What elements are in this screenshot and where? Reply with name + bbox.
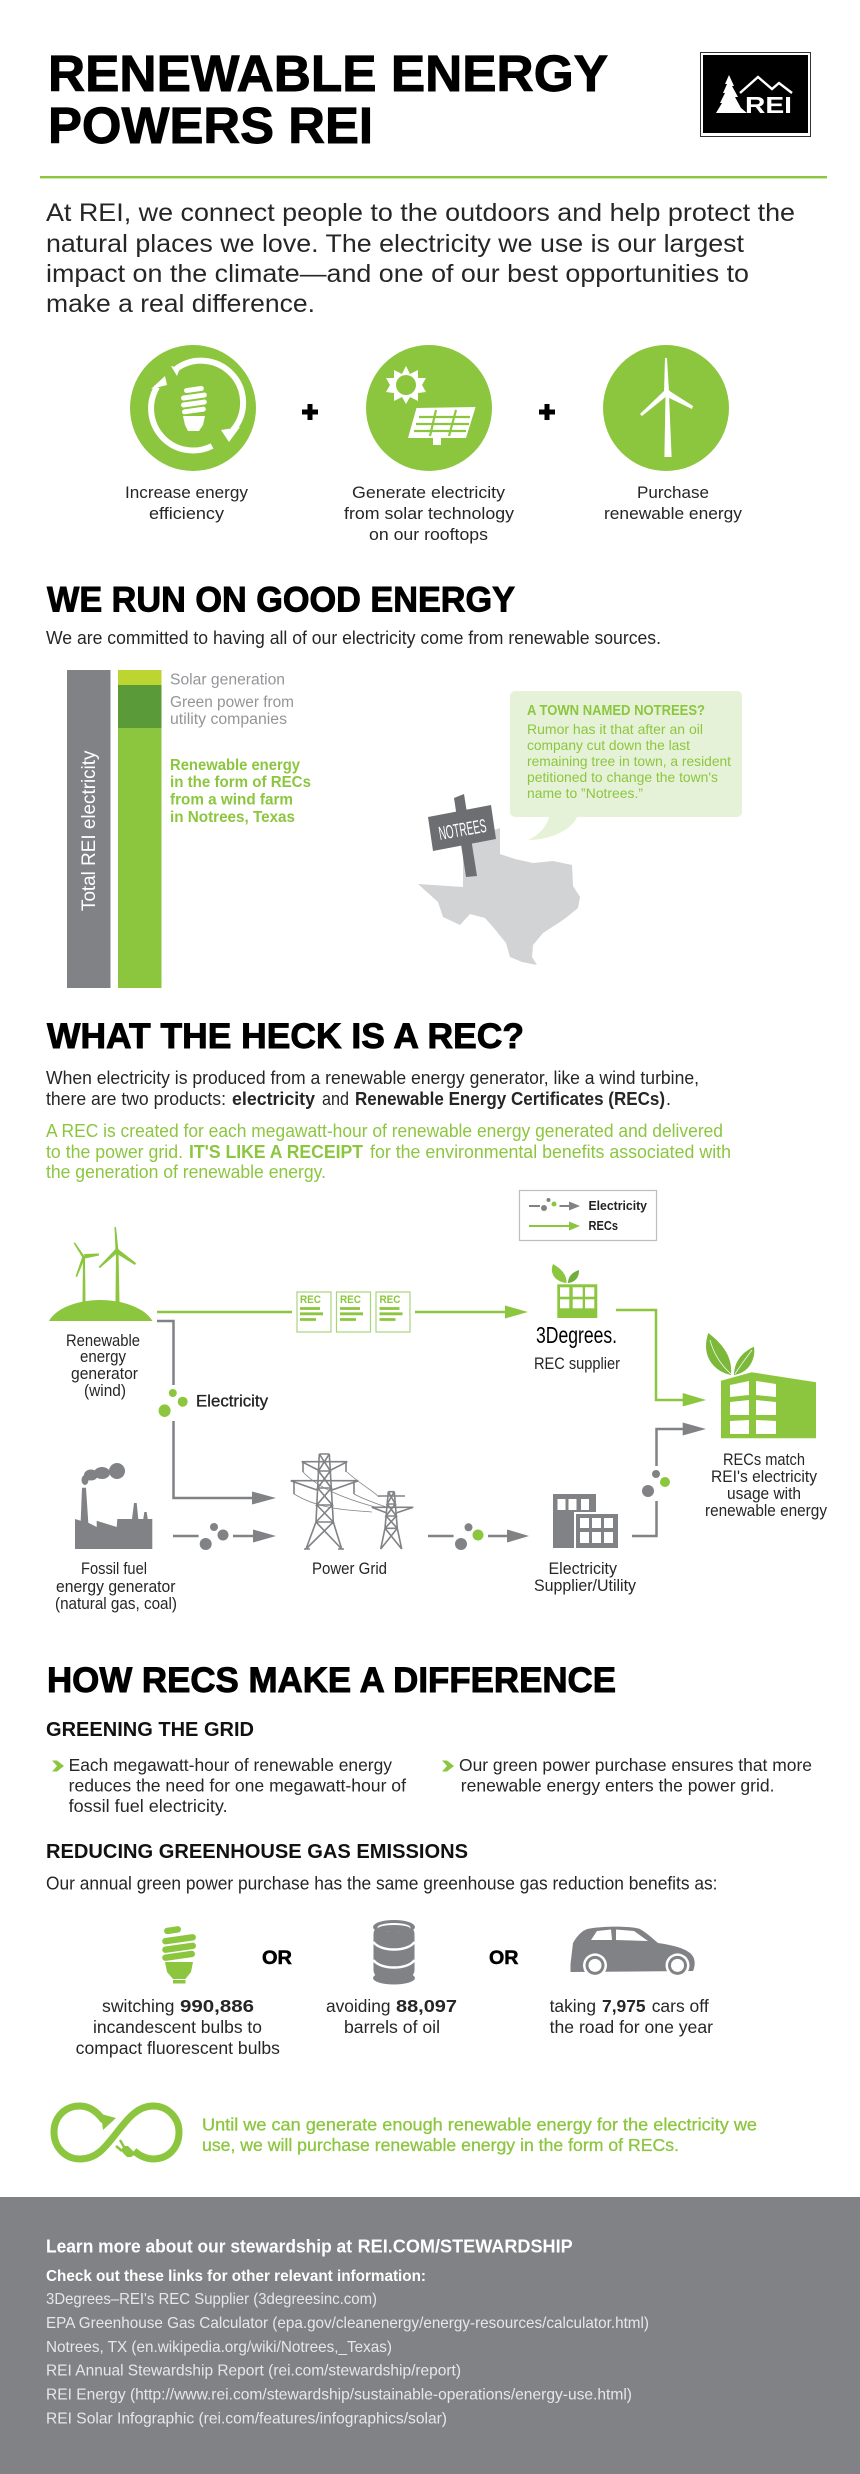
label: electricity supplier (534, 1559, 636, 1595)
caption: Generate electricity (352, 483, 506, 502)
footer links: Notrees, TX (en.wikipedia.org/wiki/Notrees,_Texas) (46, 2339, 392, 2356)
bullet: green power purchase: renewable energy enters the power grid. (461, 1776, 774, 1796)
panel: footer (0, 2197, 860, 2474)
footer heading: Learn more about our stewardship at (46, 2236, 352, 2256)
caption (125, 483, 249, 523)
stat: barrels: 88,097 (396, 1996, 457, 2016)
heading: we run on good energy: WE RUN ON GOOD ENERGY (47, 580, 515, 620)
text block: closing statement (202, 2114, 757, 2155)
label: REC supplier: REC supplier (534, 1354, 620, 1373)
label: renewable generator: (wind) (84, 1381, 126, 1400)
legend labels: from a wind farm (170, 792, 293, 808)
stat: bulbs: compact fluorescent bulbs (76, 2038, 280, 2058)
arrow: fossil electricity to grid (173, 1523, 276, 1550)
icon: REI logo (700, 52, 810, 136)
text block: receipt explanation (46, 1121, 731, 1182)
legend labels: utility companies (170, 711, 287, 728)
label: fossil fuel generator: (natural gas, coal) (55, 1594, 177, 1613)
legend (520, 1190, 656, 1240)
subheading: reducing emissions: REDUCING GREENHOUSE GAS EMISSIONS (46, 1841, 468, 1863)
icon: wind turbines on hill (49, 1227, 152, 1321)
arrow: supplier to REI (616, 1310, 706, 1406)
icon: wind turbine (603, 345, 729, 471)
text block: receipt explanation: A REC is created for each megawatt-hour of renewable energy generated and delivered (46, 1121, 723, 1141)
title: POWERS REI (48, 97, 373, 154)
legend labels: Solar generation (170, 672, 285, 688)
text block: annual purchase: Our annual green power purchase has the same greenhouse gas reduction benefits as: (46, 1874, 718, 1894)
text block: receipt explanation: IT'S LIKE A RECEIPT (189, 1142, 363, 1162)
text block: commitment: We are committed to having all of our electricity come from renewable sources. (46, 628, 661, 648)
text block: rec explanation: electricity (232, 1089, 315, 1109)
stat: cars: cars off (652, 1996, 709, 2016)
label: RECs match: renewable energy (705, 1501, 827, 1520)
caption: renewable energy (604, 504, 742, 523)
icon: REI building with leaves (706, 1333, 816, 1438)
footer heading: REI.COM/STEWARDSHIP (358, 2236, 573, 2256)
label: RECs match (705, 1450, 827, 1520)
text block: closing statement: Until we can generate enough renewable energy for the electricity we (202, 2114, 757, 2134)
text block: rec explanation: When electricity is produced from a renewable energy generator, like a wind turbine, (46, 1068, 699, 1088)
icon: bulb with circular arrows (130, 345, 256, 471)
panel: increase energy efficiency (125, 345, 256, 523)
icon: supplier building with leaves (552, 1264, 597, 1318)
icon: REC certificates: REC (300, 1294, 321, 1306)
text block: rec explanation: and (322, 1089, 349, 1109)
stat: cars (550, 1996, 713, 2037)
panel: purchase renewable energy (603, 345, 742, 523)
text block: rec explanation: . (666, 1089, 671, 1109)
label: fossil fuel generator (55, 1559, 177, 1613)
icon: infinity loop with plug (54, 2106, 179, 2159)
icon: texas map with sign: NOTREES (437, 816, 488, 845)
caption (344, 483, 515, 544)
text block: rec explanation: Renewable Energy Certificates (RECs) (355, 1089, 665, 1109)
text block: rec explanation: there are two products: (46, 1089, 226, 1109)
legend labels: Green power from (170, 694, 294, 711)
text block: receipt explanation: for the environmental benefits associated with (370, 1142, 731, 1162)
icon: green bulb (162, 1926, 196, 1984)
icon: plus (302, 404, 318, 420)
logo: 3Degrees: 3Degrees. (536, 1322, 617, 1348)
label: electricity: Electricity (196, 1392, 269, 1410)
icon: sun and solar panel (366, 345, 492, 471)
caption: on our rooftops (369, 525, 488, 544)
callout: a town named notrees: company cut down the last (527, 737, 690, 753)
icon: plus (539, 404, 555, 420)
caption (604, 483, 742, 523)
stat: barrels: barrels of oil (344, 2017, 440, 2037)
legend labels (170, 672, 311, 826)
bar: sources stack (118, 670, 162, 988)
text block: closing statement: use, we will purchase renewable energy in the form of RECs. (202, 2135, 679, 2155)
callout: a town named notrees (510, 691, 742, 840)
stat: cars: taking (550, 1996, 596, 2016)
icon: utility buildings (553, 1494, 618, 1548)
icon: power grid towers (291, 1454, 413, 1549)
icon: REC certificates (297, 1292, 410, 1332)
intro text: make a real difference. (46, 290, 315, 318)
title: RENEWABLE ENERGY (48, 45, 608, 102)
intro text (46, 199, 795, 318)
subheading: greening the grid: GREENING THE GRID (46, 1719, 254, 1741)
label: RECs match: usage with (727, 1484, 801, 1503)
bullet: green power purchase: Our green power purchase ensures that more (459, 1755, 812, 1775)
heading: what the heck is a rec: WHAT THE HECK IS A REC? (47, 1017, 524, 1056)
footer links: 3Degrees–REI's REC Supplier (3degreesinc.com) (46, 2291, 377, 2308)
label: electricity supplier: Electricity (548, 1559, 617, 1578)
label: RECs match: RECs match (723, 1450, 805, 1469)
legend: RECs (588, 1219, 618, 1233)
stat: cars: the road for one year (550, 2017, 713, 2037)
arrow: utility to REI (632, 1422, 706, 1536)
footer links (46, 2291, 649, 2427)
intro text: At REI, we connect people to the outdoors and help protect the (46, 199, 795, 227)
text block: receipt explanation: the generation of renewable energy. (46, 1162, 326, 1182)
icon: texas map with sign (418, 794, 580, 965)
bullet: megawatt-hour: Each megawatt-hour of renewable energy (69, 1755, 392, 1775)
arrow: REC flow to supplier (157, 1306, 528, 1318)
text block: receipt explanation: to the power grid. (46, 1142, 183, 1162)
bar: total electricity (67, 670, 110, 988)
legend: Electricity (588, 1199, 647, 1213)
intro text: impact on the climate—and one of our best opportunities to (46, 260, 749, 288)
icon: REC certificates: REC (340, 1294, 361, 1306)
footer links: EPA Greenhouse Gas Calculator (epa.gov/cleanenergy/energy-resources/calculator.html) (46, 2315, 649, 2332)
label: fossil fuel generator: Fossil fuel (81, 1559, 147, 1578)
text: OR: OR (489, 1948, 519, 1969)
label: renewable generator (66, 1331, 140, 1400)
bullet: megawatt-hour (52, 1755, 406, 1816)
label: electricity supplier: Supplier/Utility (534, 1576, 636, 1595)
icon: car (570, 1927, 695, 1977)
caption: Increase energy (125, 483, 249, 502)
stat: bulbs: incandescent bulbs to (93, 2017, 262, 2037)
label: fossil fuel generator: energy generator (56, 1577, 176, 1596)
bullet: megawatt-hour: fossil fuel electricity. (69, 1796, 228, 1816)
stat: barrels (326, 1996, 457, 2037)
bullet: green power purchase (442, 1755, 812, 1796)
callout: a town named notrees: A TOWN NAMED NOTREES? (527, 703, 705, 719)
bullet: megawatt-hour: reduces the need for one megawatt-hour of (69, 1776, 406, 1796)
label: renewable generator: energy (80, 1347, 126, 1366)
arrow: grid to utility (428, 1523, 529, 1550)
panel: solar technology (344, 345, 515, 544)
icon: factory (75, 1463, 152, 1549)
stat: bulbs: switching (102, 1996, 174, 2016)
footer links: REI Energy (http://www.rei.com/stewardship/sustainable-operations/energy-use.html) (46, 2387, 632, 2404)
heading: how RECs make a difference: HOW RECS MAKE A DIFFERENCE (47, 1661, 616, 1700)
footer links: REI Solar Infographic (rei.com/features/infographics/solar) (46, 2410, 447, 2427)
label: renewable generator: Renewable (66, 1331, 140, 1350)
stat: cars: 7,975 (602, 1996, 646, 2016)
caption: efficiency (149, 504, 225, 523)
icon: REI logo: REI (745, 92, 792, 118)
arrow: wind electricity to grid (157, 1321, 276, 1504)
footer links: REI Annual Stewardship Report (rei.com/stewardship/report) (46, 2363, 461, 2380)
callout: a town named notrees: petitioned to change the town's (527, 769, 718, 785)
callout: a town named notrees: name to ‟Notrees.” (527, 785, 643, 801)
callout: a town named notrees: Rumor has it that after an oil (527, 721, 703, 737)
stat: barrels: avoiding (326, 1996, 390, 2016)
text: OR: OR (262, 1948, 292, 1969)
bar chart: electricity mix (67, 670, 311, 988)
intro text: natural places we love. The electricity we use is our largest (46, 230, 744, 258)
icon: REC certificates: REC (380, 1294, 401, 1306)
caption: Purchase (637, 483, 709, 502)
callout: a town named notrees: remaining tree in town, a resident (527, 753, 731, 769)
legend labels: Renewable energy (170, 757, 300, 774)
icon: oil barrel (373, 1920, 415, 1984)
label: renewable generator: generator (71, 1364, 138, 1383)
legend labels: in Notrees, Texas (170, 809, 295, 826)
footer heading (46, 2236, 573, 2256)
label: power grid: Power Grid (312, 1559, 387, 1578)
label: RECs match: REI's electricity (711, 1467, 817, 1486)
title (48, 45, 608, 154)
footer subheading: Check out these links for other relevant information: (46, 2268, 426, 2285)
stat: bulbs: 990,886 (180, 1996, 254, 2016)
stat: bulbs (76, 1996, 280, 2058)
legend labels: in the form of RECs (170, 774, 311, 791)
caption: from solar technology (344, 504, 515, 523)
text block: rec explanation (46, 1068, 699, 1109)
bar: total electricity: Total REI electricity (78, 750, 100, 911)
